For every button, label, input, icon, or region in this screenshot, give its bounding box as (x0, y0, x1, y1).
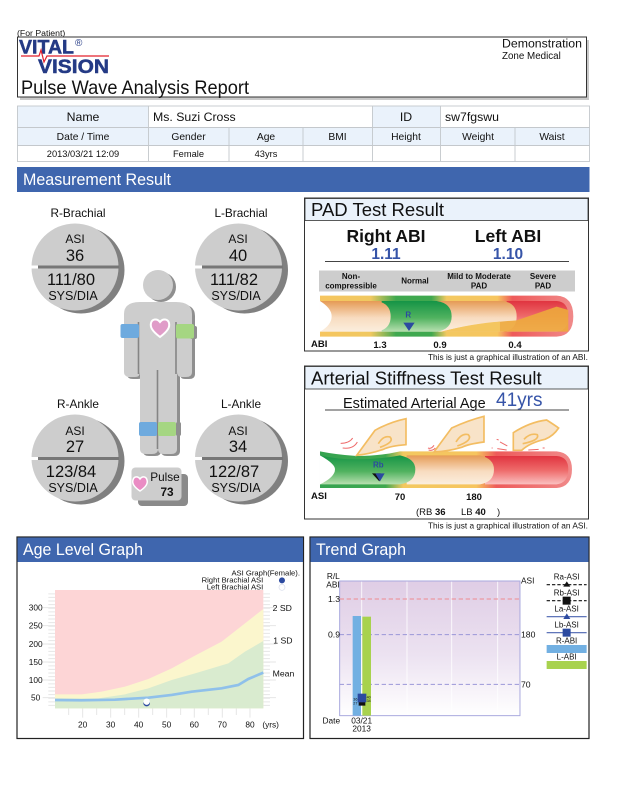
heading: Trend Graph: Trend Graph (316, 541, 406, 559)
category band: PAD (471, 282, 487, 290)
patient info table: Height (391, 132, 421, 143)
pulse box (132, 468, 188, 506)
patient info table: Gender (171, 132, 206, 143)
marker: patient ASI (143, 698, 150, 706)
logo: Vital Vision: VITAL (19, 38, 74, 58)
y axis labels: 150 (29, 657, 43, 667)
gauge: L-Brachial: ASI (228, 232, 248, 246)
legend: R-ABI (556, 636, 577, 645)
axis labels: ASI (521, 576, 534, 586)
y axis labels: 300 (29, 603, 43, 613)
patient info table: Weight (462, 132, 494, 143)
cuff: right ankle (139, 422, 157, 436)
gauge: L-Ankle: L-Ankle (221, 397, 261, 411)
y axis labels: 100 (29, 675, 43, 685)
marker: R/L position: R (405, 311, 411, 320)
axis labels: 1.3 (328, 594, 340, 604)
SD labels: Mean (273, 668, 294, 678)
ASI scale: LB 40 (461, 507, 486, 518)
patient info table: Waist (539, 132, 565, 143)
gauge: L-Brachial (195, 206, 288, 314)
x axis labels (78, 719, 279, 730)
gauge: R-Brachial: 36 (66, 247, 84, 265)
x axis labels: (yrs) (262, 720, 279, 730)
ABI values: 1.10 (493, 246, 523, 263)
ABI scale: 0.9 (433, 340, 447, 351)
ASI scale: ) (497, 507, 500, 518)
legend: Rb-ASI (554, 588, 580, 597)
heading: Trend Graph (310, 538, 588, 562)
gauge: L-Brachial: SYS/DIA (211, 289, 261, 303)
cuff: left arm (176, 324, 194, 338)
SD labels: 2 SD (273, 603, 292, 613)
y axis labels: 250 (29, 621, 43, 631)
trend chart (323, 571, 587, 734)
ASI scale: (RB 36 (416, 507, 446, 518)
axis labels: 70 (521, 679, 531, 689)
gauge: R-Brachial: SYS/DIA (48, 289, 98, 303)
gauge: L-Brachial: 111/82 (210, 271, 258, 289)
gauge: L-Ankle: 34 (229, 438, 247, 456)
axis labels: 0.9 (328, 630, 340, 640)
estimated arterial age: 41yrs (496, 390, 542, 411)
category band: Non- (342, 272, 360, 281)
category band: compressible (325, 282, 377, 290)
gauge: R-Brachial: ASI (65, 232, 85, 246)
report header panel (18, 36, 589, 100)
patient info table: sw7fgswu (445, 110, 499, 124)
patient info table (17, 106, 590, 162)
icon: heart on chest (151, 319, 169, 337)
gauge: R-Brachial: R-Brachial (50, 206, 106, 220)
organisation name: Demonstration (502, 36, 582, 50)
gauge: R-Brachial: 111/80 (47, 271, 95, 289)
heading: Age Level Graph: Age Level Graph (23, 541, 143, 559)
logo: Vital Vision: ® (75, 38, 83, 49)
legend: L-ABI (557, 652, 577, 661)
cuff: left ankle (158, 422, 176, 436)
report title: Pulse Wave Analysis Report (21, 77, 250, 99)
organisation name: Zone Medical (502, 51, 561, 62)
x axis labels: 60 (190, 719, 199, 729)
organisation name (502, 36, 582, 62)
bar: L-ABI (362, 617, 371, 716)
patient info table: BMI (328, 132, 347, 143)
axis labels: 2013 (352, 724, 371, 734)
patient info table: Name (67, 110, 100, 124)
markers: ASI points: 40 (367, 695, 371, 699)
icon: hand pressing, soft artery (357, 419, 406, 455)
patient info table: Date / Time (57, 132, 110, 143)
x axis labels: 40 (134, 719, 144, 729)
estimated arterial age: Estimated Arterial Age (343, 396, 486, 412)
panel: Age Level Graph (17, 537, 304, 738)
heading: PAD Test Result: PAD Test Result (311, 199, 444, 220)
section heading: Measurement Result (17, 167, 590, 192)
category band (319, 270, 575, 292)
cuff: right arm (120, 324, 139, 338)
category band: Severe (530, 272, 557, 281)
patient info table: Ms. Suzi Cross (153, 110, 236, 124)
gauge: R-Ankle: 123/84 (46, 463, 96, 481)
gauge: L-Ankle: SYS/DIA (211, 481, 261, 495)
x axis labels: 30 (106, 719, 116, 729)
y axis labels (29, 603, 43, 703)
patient info table: 43yrs (255, 149, 278, 159)
gauge: R-Ankle: SYS/DIA (48, 481, 98, 495)
note: ASI illustration: This is just a graphical illustration of an ASI. (428, 520, 588, 530)
x axis labels: 70 (218, 719, 227, 729)
gauge: L-Ankle: 122/87 (209, 463, 259, 481)
ABI scale: 0.4 (508, 340, 522, 351)
heading: PAD Test Result (305, 198, 588, 220)
category band: Mild to Moderate (447, 272, 511, 281)
y axis labels: 200 (29, 639, 43, 649)
axis labels: R/L (327, 571, 340, 581)
bar: R-ABI (353, 616, 361, 716)
gauge: L-Brachial: L-Brachial (214, 206, 268, 220)
gauge: R-Ankle (31, 397, 124, 504)
ABI scale: 1.3 (373, 340, 387, 351)
body figure (120, 270, 197, 456)
SD labels: 1 SD (273, 636, 293, 646)
ABI values: 1.11 (371, 246, 401, 263)
ASI scale (311, 491, 500, 518)
x axis labels: 80 (245, 719, 255, 729)
legend (202, 569, 300, 592)
ABI values: Left ABI (475, 226, 541, 246)
note: ABI illustration: This is just a graphical illustration of an ABI. (428, 352, 588, 362)
markers: ASI points: 27 (353, 701, 357, 705)
axis labels (323, 571, 536, 734)
gauge: L-Ankle (195, 397, 288, 504)
legend (547, 572, 587, 669)
ASI scale: ASI (311, 491, 327, 502)
logo: Vital Vision: VISION (38, 57, 109, 78)
panel: PAD Test Result (304, 198, 588, 351)
ASI scale: 70 (395, 492, 405, 503)
SD labels (273, 603, 294, 678)
gauge: R-Ankle: ASI (65, 424, 85, 438)
axis labels: ABI (326, 579, 340, 589)
y axis labels: 50 (31, 693, 41, 703)
pulse box: Pulse (150, 470, 180, 484)
icon: hand pressing, normal artery (434, 416, 484, 452)
ABI scale: ABI (311, 339, 327, 350)
heading: Arterial Stiffness Test Result: Arterial Stiffness Test Result (311, 368, 542, 388)
legend: Ra-ASI (554, 572, 580, 581)
gauge: R-Ankle: 27 (66, 438, 84, 456)
marker: R/L position: Rb (373, 461, 384, 470)
gauge: R-Brachial (31, 206, 124, 314)
marker: R/L position (372, 461, 385, 481)
axis labels: 180 (521, 630, 536, 640)
marker: R/L position (403, 311, 415, 331)
legend: ASI Graph(Female). (231, 569, 300, 578)
gauge: R-Ankle: R-Ankle (57, 397, 99, 411)
ABI values: Right ABI (346, 226, 426, 246)
category band: PAD (535, 282, 551, 290)
axis labels: 03/21 (351, 715, 372, 725)
markers: ASI points (353, 694, 371, 706)
legend: Right Brachial ASI (202, 576, 263, 585)
artery illustration: ABI (320, 296, 573, 337)
legend: La-ASI (554, 604, 579, 613)
patient info table: 2013/03/21 12:09 (47, 149, 119, 159)
section heading: Measurement Result: Measurement Result (23, 171, 171, 189)
legend: Left Brachial ASI (207, 583, 263, 592)
patient info table: Age (257, 132, 275, 143)
gauge: L-Ankle: ASI (228, 424, 248, 438)
gauge: L-Brachial: 40 (229, 247, 247, 265)
patient info table: ID (400, 110, 412, 124)
axis labels: Date (323, 715, 340, 725)
category band: Normal (401, 276, 429, 286)
ABI values (325, 226, 569, 263)
x axis labels: 50 (162, 719, 172, 729)
ABI scale (311, 339, 522, 351)
panel: Arterial Stiffness Test Result (304, 366, 588, 519)
legend: Lb-ASI (554, 620, 579, 629)
panel: Trend Graph (310, 537, 589, 738)
patient label: (For Patient) (17, 28, 65, 38)
markers: ASI points: 36 (353, 698, 357, 702)
patient info table: Female (173, 149, 204, 159)
markers: ASI points: 34 (367, 699, 371, 703)
pulse box: 73 (160, 485, 174, 499)
vibration marks (341, 438, 545, 450)
logo: Vital Vision (19, 38, 109, 78)
line chart: ASI by age (29, 569, 300, 730)
estimated arterial age (325, 390, 569, 412)
heading: Age Level Graph (18, 538, 303, 562)
ASI scale: 180 (466, 492, 482, 503)
artery illustration: ASI (320, 416, 572, 488)
icon: pulse heart (133, 477, 147, 491)
x axis labels: 20 (78, 719, 88, 729)
icon: hand pressing, stiff artery (513, 420, 559, 450)
